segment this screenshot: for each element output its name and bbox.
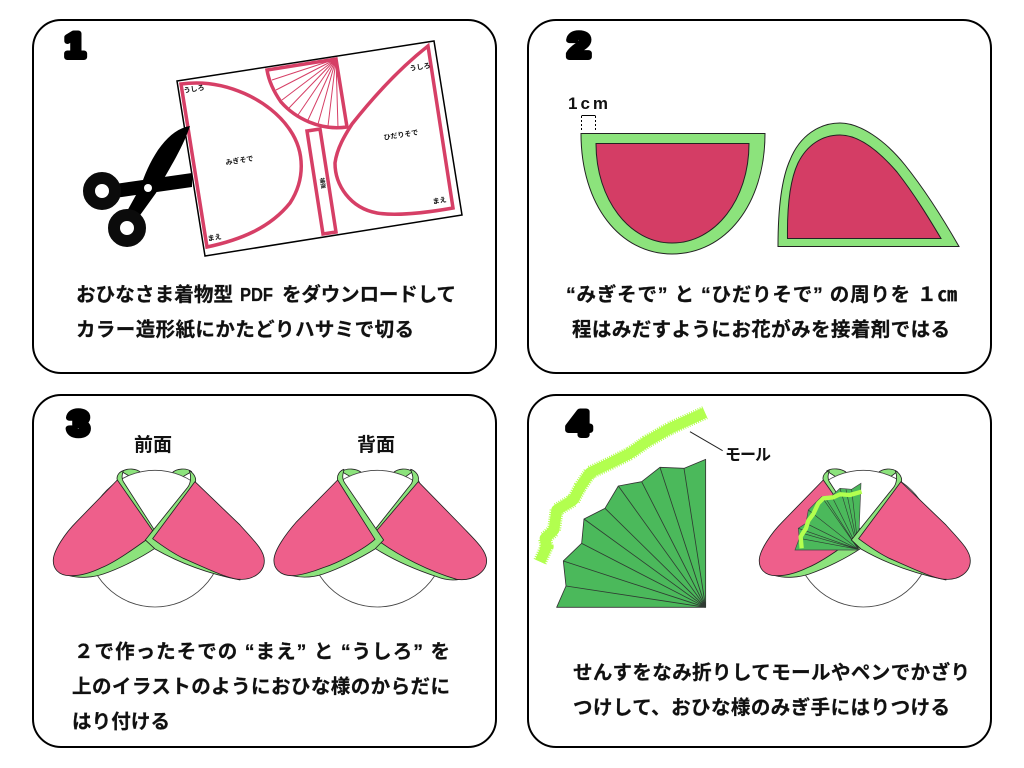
instructions 2: 程はみだすようにお花がみを接着剤ではる (572, 318, 950, 341)
chenille label: モール (725, 447, 771, 464)
instructions 1: おひなさま着物型 (76, 284, 233, 306)
step number 1: 1 (65, 27, 85, 65)
1cm label: 1cm (568, 94, 608, 113)
panel: step 2 (528, 20, 991, 373)
sheet labels: まえ (207, 232, 222, 243)
figure: folded fan and chenille (540, 413, 723, 607)
pleated fan (557, 459, 706, 607)
right sleeve with margin (581, 134, 765, 254)
step number 2: 2 (568, 27, 590, 65)
instructions 3 (72, 641, 450, 733)
instructions 2 (566, 283, 957, 341)
sheet labels (183, 61, 447, 243)
sheet labels: まえ (432, 195, 447, 206)
icon: scissors (89, 126, 192, 241)
instructions 1: カラー造形紙にかたどりハサミで切る (76, 319, 414, 341)
panel: step 4 (528, 395, 991, 747)
instructions 4 (573, 661, 970, 719)
sheet labels: みぎそで (225, 154, 254, 167)
instructions 3: ２で作ったそでの “まえ” と “うしろ” を (74, 641, 450, 663)
instructions 3: はり付ける (72, 711, 170, 733)
heading: back: 背面 (357, 434, 395, 456)
instructions 4: せんすをなみ折りしてモールやペンでかざり (573, 661, 970, 684)
figure: back view (274, 469, 487, 607)
step number 4: 4 (568, 405, 590, 443)
chenille stem (540, 413, 705, 562)
sheet labels: うしろ (183, 83, 205, 95)
sheet labels: うしろ (409, 61, 431, 73)
heading: front: 前面 (134, 434, 172, 456)
small fan (795, 483, 861, 550)
sheet labels: 補強 (318, 177, 328, 190)
left sleeve with margin (778, 123, 959, 246)
figure: front view (53, 469, 264, 607)
small chenille (801, 492, 862, 548)
1cm label (568, 94, 608, 132)
figure: dressed doll (759, 469, 970, 607)
step number 3: 3 (68, 405, 89, 443)
sheet labels: ひだりそで (383, 128, 419, 142)
instructions 1 (76, 283, 456, 341)
leader line (690, 432, 723, 451)
instructions 1: をダウンロードして (282, 283, 456, 306)
instructions 2: “みぎそで” と “ひだりそで” の周りを １㎝ (566, 283, 957, 306)
panel: step 3 (33, 395, 496, 747)
panel: step 1 (33, 20, 496, 373)
instructions 3: 上のイラストのようにおひな様のからだに (72, 676, 450, 698)
instructions 4: つけして、おひな様のみぎ手にはりつける (573, 696, 950, 719)
pattern sheet (177, 41, 462, 256)
instructions 1: PDF (240, 285, 273, 305)
